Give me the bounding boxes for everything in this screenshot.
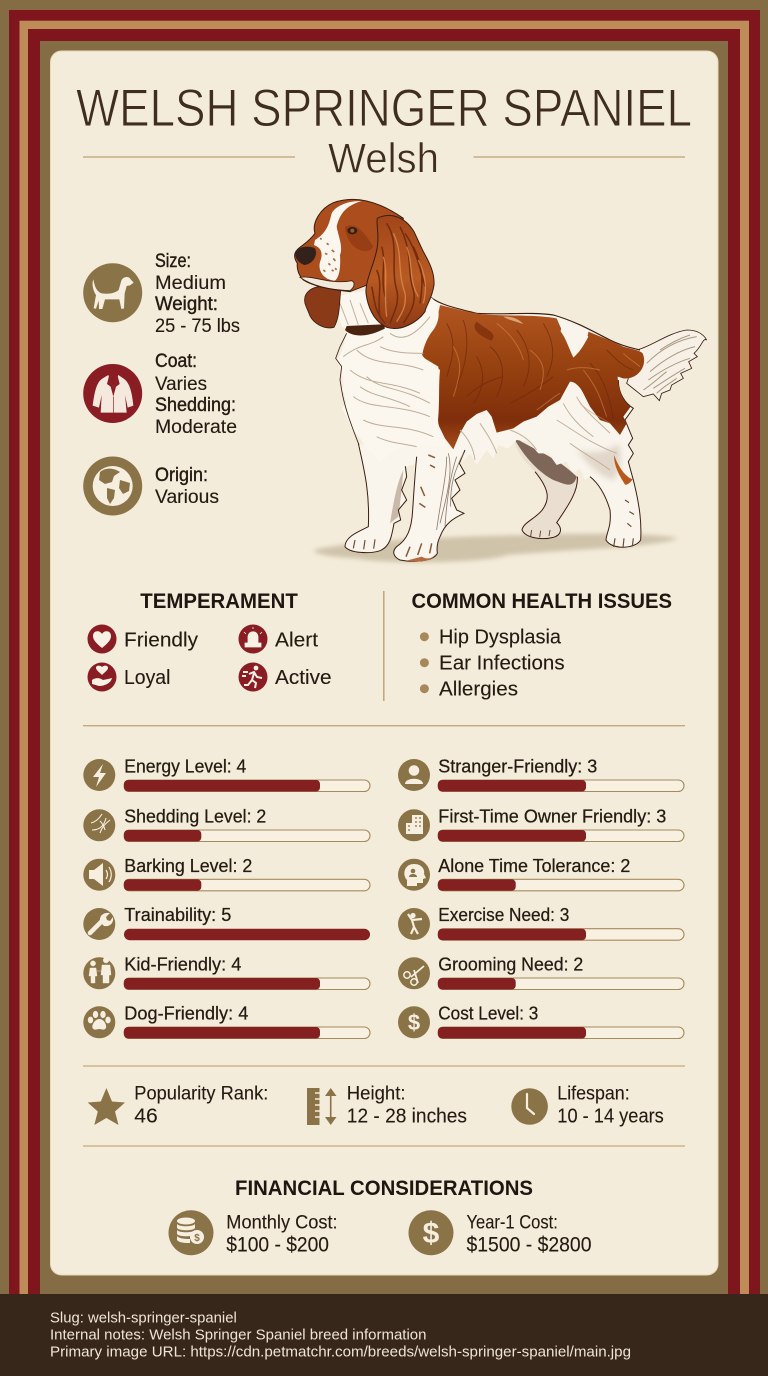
footer bar <box>0 1294 768 1376</box>
dog torso and near hind leg <box>340 297 641 548</box>
stat: height <box>307 1083 467 1128</box>
rating: dog-friendly: Dog-Friendly: 4 <box>124 1004 248 1024</box>
rating: dog-friendly <box>83 1004 370 1038</box>
stat: lifespan: 10 - 14 years <box>557 1106 664 1128</box>
panel: temperament <box>88 590 332 692</box>
year-1 cost: $ <box>423 1217 440 1250</box>
rating: alone time tolerance <box>398 856 684 891</box>
text: size: Medium <box>155 273 226 294</box>
year-1 cost: $1500 - $2800 <box>466 1234 592 1257</box>
footer notes: Internal notes: Welsh Springer Spaniel breed information <box>50 1327 426 1343</box>
trait: alert <box>238 624 318 654</box>
text: size <box>155 251 240 337</box>
trait: active <box>238 662 332 692</box>
rating: cost level: Cost Level: 3 <box>438 1004 538 1024</box>
rating: first-time owner friendly <box>398 807 684 842</box>
trait: alert: Alert <box>275 630 318 652</box>
trait: loyal <box>88 662 170 692</box>
text: size: 25 - 75 lbs <box>155 316 240 337</box>
stat: popularity rank <box>88 1083 268 1128</box>
dog near front leg <box>394 440 465 562</box>
text: coat: Varies <box>155 374 207 395</box>
rating: alone time tolerance: Alone Time Tolerance: 2 <box>438 856 630 876</box>
rating: energy level: Energy Level: 4 <box>124 756 246 776</box>
heading: financial considerations: FINANCIAL CONSIDERATIONS <box>235 1177 533 1200</box>
text: coat: Coat: <box>155 351 197 372</box>
rating: barking level: Barking Level: 2 <box>124 856 252 876</box>
stat: height: Height: <box>347 1083 406 1104</box>
dog near ear <box>366 215 434 328</box>
dog white fur strokes <box>460 397 617 470</box>
rating: cost level: $ <box>408 1010 420 1035</box>
trait: loyal: Loyal <box>124 667 170 689</box>
dog tail <box>627 330 707 401</box>
rating: kid-friendly <box>83 955 370 990</box>
trait: friendly <box>88 624 198 654</box>
panel: common health issues <box>412 590 672 701</box>
year-1 cost: Year-1 Cost: <box>466 1212 558 1233</box>
text: origin <box>155 465 219 508</box>
rating: exercise need <box>398 905 684 940</box>
health list: Ear Infections <box>439 653 565 675</box>
monthly cost: $100 - $200 <box>226 1234 329 1257</box>
health list: Allergies <box>439 679 518 701</box>
illustration: Welsh Springer Spaniel dog <box>295 199 707 562</box>
text: origin: Various <box>155 487 219 508</box>
text: coat: Shedding: <box>155 395 236 416</box>
info: origin <box>83 456 219 516</box>
icon: globe <box>83 456 142 516</box>
stat: lifespan: Lifespan: <box>557 1083 630 1104</box>
text: size: Weight: <box>155 294 218 315</box>
heading: temperament: TEMPERAMENT <box>140 590 298 613</box>
rating: shedding level: Shedding Level: 2 <box>124 807 266 827</box>
year-1 cost <box>408 1210 592 1257</box>
rating: grooming need <box>398 955 684 990</box>
rating: exercise need: Exercise Need: 3 <box>438 905 569 925</box>
health list <box>420 626 565 701</box>
trait: friendly: Friendly <box>124 630 198 652</box>
text: origin: Origin: <box>155 465 208 486</box>
rating: stranger-friendly <box>398 756 684 792</box>
icon: coat <box>83 364 142 423</box>
rating: barking level <box>83 856 370 891</box>
icon: dog silhouette <box>83 263 142 322</box>
text: coat <box>155 351 237 438</box>
panel: trait ratings <box>83 756 684 1038</box>
text: coat: Moderate <box>155 417 237 438</box>
text: size: Size: <box>155 251 191 272</box>
trait: active: Active <box>275 667 332 689</box>
health list: Hip Dysplasia <box>439 626 562 648</box>
rating: shedding level <box>83 807 370 842</box>
stat: lifespan <box>511 1083 664 1128</box>
dog far front leg <box>345 443 407 553</box>
dog far ear <box>305 286 341 328</box>
dog head <box>295 199 403 292</box>
dog saddle markings <box>422 305 644 449</box>
info: coat and shedding <box>83 351 237 438</box>
rating: kid-friendly: Kid-Friendly: 4 <box>124 955 241 975</box>
rating: stranger-friendly: Stranger-Friendly: 3 <box>438 756 597 776</box>
dog far hind leg <box>513 437 577 539</box>
stat: popularity rank: Popularity Rank: <box>134 1083 268 1104</box>
stat: height: 12 - 28 inches <box>347 1106 467 1128</box>
stats row <box>88 1083 664 1128</box>
rating: trainability: Trainability: 5 <box>124 905 231 925</box>
rating: cost level <box>398 1004 684 1038</box>
panel: main card <box>50 51 718 1275</box>
footer notes <box>50 1310 631 1361</box>
heading: health issues: COMMON HEALTH ISSUES <box>412 590 672 613</box>
dog neck and chest <box>336 290 448 463</box>
footer notes: Primary image URL: https://cdn.petmatchr.com/breeds/welsh-springer-spaniel/main.jpg <box>50 1345 631 1361</box>
info: size and weight <box>83 251 240 337</box>
stat: popularity rank: 46 <box>134 1106 158 1128</box>
monthly cost: $ <box>194 1233 200 1244</box>
rating: first-time owner friendly: First-Time Owner Friendly: 3 <box>438 807 666 827</box>
panel: financial considerations <box>168 1177 592 1257</box>
rating: trainability <box>83 905 370 940</box>
subtitle with side rules: Welsh <box>328 134 439 182</box>
rating: energy level <box>83 756 370 792</box>
monthly cost <box>168 1210 338 1257</box>
monthly cost: Monthly Cost: <box>226 1212 338 1233</box>
footer notes: Slug: welsh-springer-spaniel <box>50 1310 237 1326</box>
rating: grooming need: Grooming Need: 2 <box>438 955 583 975</box>
